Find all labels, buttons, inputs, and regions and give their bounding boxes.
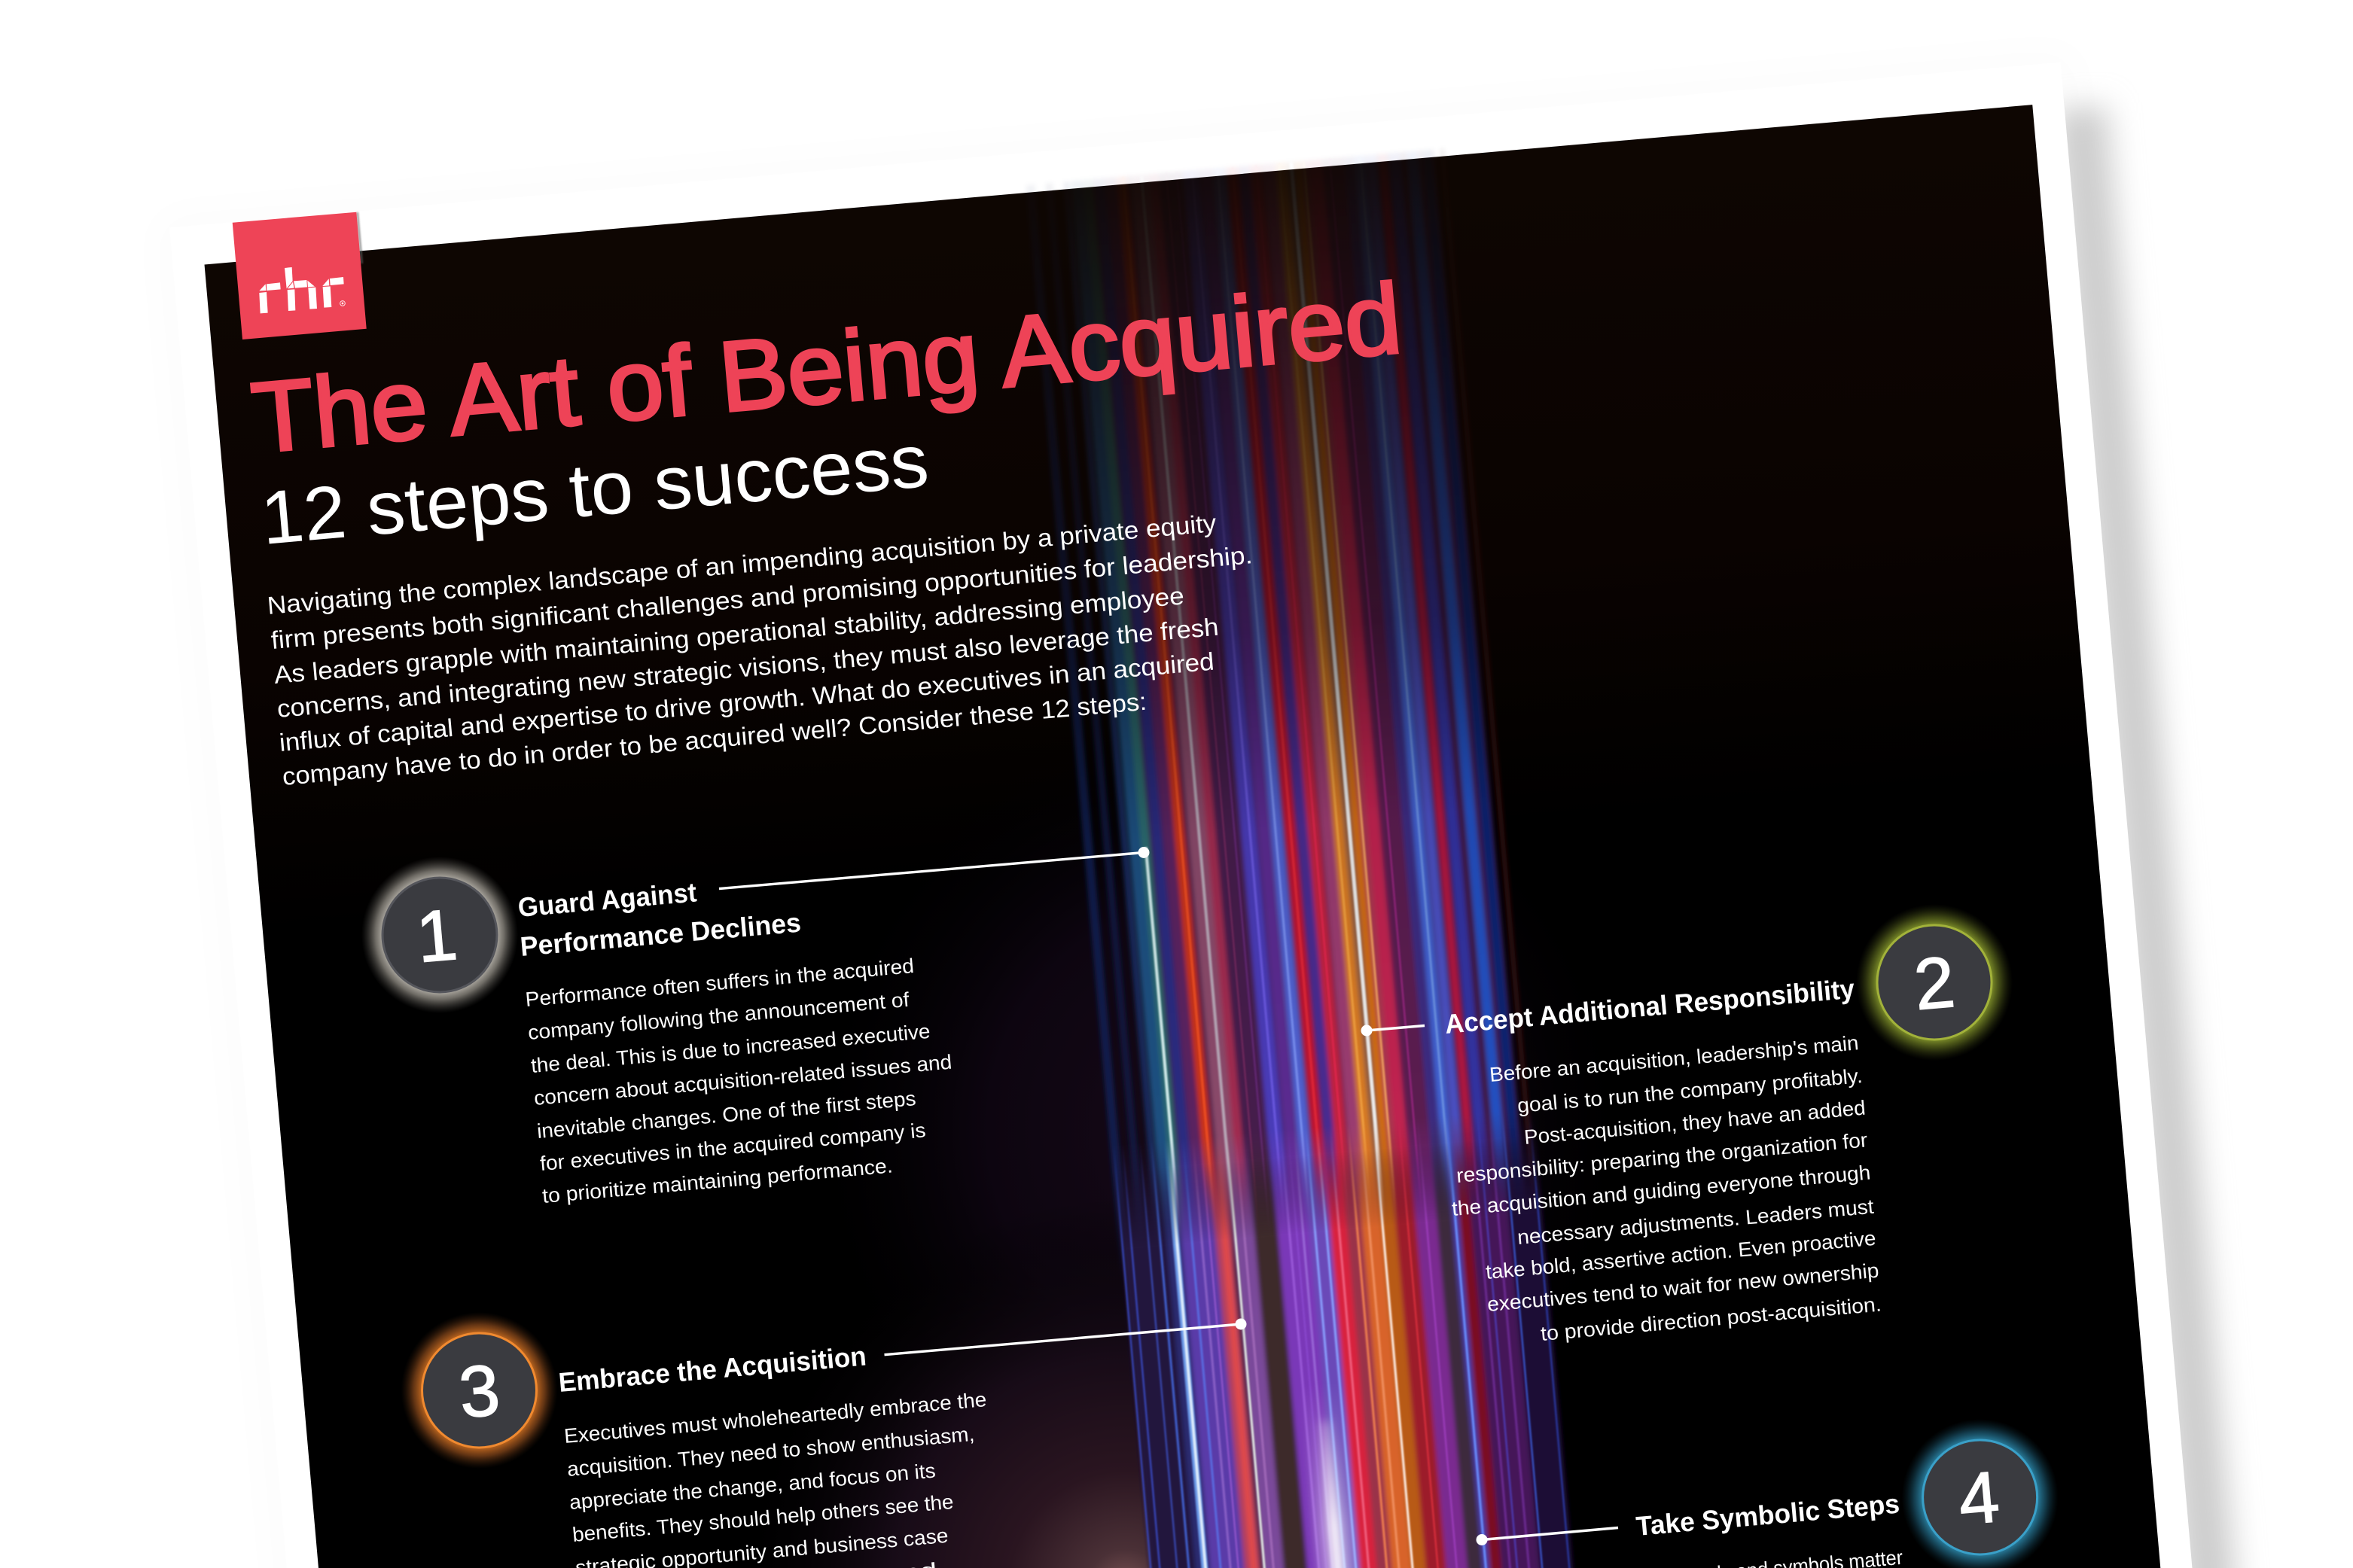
intro paragraph: firm presents both significant challenges and promising opportunities for leadership. (270, 540, 1254, 654)
step 4: Take Symbolic Steps (1476, 1419, 2059, 1568)
step 3 number badge: 3 (456, 1350, 503, 1433)
step 2 body: Post-acquisition, they have an added (1523, 1096, 1867, 1149)
step 1 number badge (361, 857, 518, 1013)
step 2 body: the acquisition and guiding everyone through (1451, 1161, 1871, 1220)
step 1 body: Performance often suffers in the acquired (524, 955, 915, 1011)
background glow (527, 753, 1882, 1568)
step 1 heading: Performance Declines (519, 907, 802, 962)
logo square (233, 212, 367, 339)
intro paragraph: company have to do in order to be acquired well? Consider these 12 steps: (281, 687, 1148, 790)
black infographic page (205, 105, 2196, 1568)
step 1 number badge: 1 (413, 894, 460, 978)
step 2 heading: Accept Additional Responsibility (1443, 973, 1856, 1040)
step 3 number badge (401, 1312, 557, 1469)
step 3: Embrace the Acquisition (401, 1312, 1247, 1568)
step 2 body: take bold, assertive action. Even proactive (1485, 1227, 1877, 1283)
step 4 heading: Take Symbolic Steps (1635, 1488, 1900, 1542)
intro paragraph: As leaders grapple with maintaining operational stability, addressing employee (273, 581, 1185, 689)
intro paragraph (266, 509, 1254, 790)
step 2: Accept Additional Responsibility (1361, 904, 2013, 1345)
step 1 heading: Guard Against (517, 876, 698, 923)
step 3 body (563, 1388, 987, 1568)
light streaks (1026, 148, 1602, 1568)
step 1: Guard Against Performance Declines (361, 847, 1149, 1207)
step 3 heading: Embrace the Acquisition (557, 1340, 867, 1398)
step 2 body: goal is to run the company profitably. (1516, 1064, 1864, 1117)
subtitle: 12 steps to success (258, 419, 932, 561)
upper streaks (1026, 148, 1544, 1317)
step 2 number badge: 2 (1911, 942, 1958, 1025)
step 1 body: company following the announcement of (527, 988, 910, 1044)
step 1 connector (719, 847, 1149, 889)
step 3 body: appreciate the change, and focus on its (568, 1460, 937, 1514)
step 3 body: Executives must wholeheartedly embrace the (563, 1388, 987, 1448)
step 1 body (524, 955, 952, 1207)
intro paragraph: influx of capital and expertise to drive growth. What do executives in an acquired (278, 647, 1215, 757)
step 2 body: Before an acquisition, leadership's main (1489, 1031, 1860, 1086)
logo shadow (357, 212, 363, 263)
step 1 body: to prioritize maintaining performance. (541, 1154, 894, 1207)
step 3 body: benefits. They should help others see the (571, 1490, 955, 1546)
step 2 body: necessary adjustments. Leaders must (1516, 1195, 1875, 1249)
step 1 body: the deal. This is due to increased executive (530, 1020, 931, 1077)
step 3 body: acquisition. They need to show enthusiasm, (566, 1423, 975, 1481)
step 2 body: responsibility: preparing the organization for (1455, 1128, 1868, 1187)
step 4 number badge: 4 (1955, 1457, 2002, 1540)
step 4 number badge (1902, 1419, 2059, 1568)
step 1 body: concern about acquisition-related issues and (533, 1051, 952, 1110)
step 2 body (1451, 1031, 1882, 1345)
title: The Art of Being Acquired (248, 263, 1406, 473)
light flare (1302, 1382, 1387, 1568)
step 3 connector (884, 1319, 1247, 1355)
step 2 number badge (1856, 904, 2013, 1061)
intro paragraph: Navigating the complex landscape of an impending acquisition by a private equity (266, 509, 1218, 620)
step 4 connector (1476, 1528, 1618, 1545)
logo (233, 212, 367, 339)
step 2 body: executives tend to wait for new ownership (1486, 1259, 1880, 1316)
step 2 body: to provide direction post-acquisition. (1540, 1293, 1882, 1345)
rhr mark (259, 267, 345, 313)
step 1 heading (517, 876, 802, 962)
step 1 body: inevitable changes. One of the first steps (536, 1087, 917, 1143)
intro paragraph: concerns, and integrating new strategic visions, they must also leverage the fresh (276, 613, 1220, 723)
step 1 body: for executives in the acquired company is (539, 1119, 927, 1175)
step 2 connector (1361, 1025, 1425, 1036)
lower streaks (1114, 1116, 1575, 1568)
